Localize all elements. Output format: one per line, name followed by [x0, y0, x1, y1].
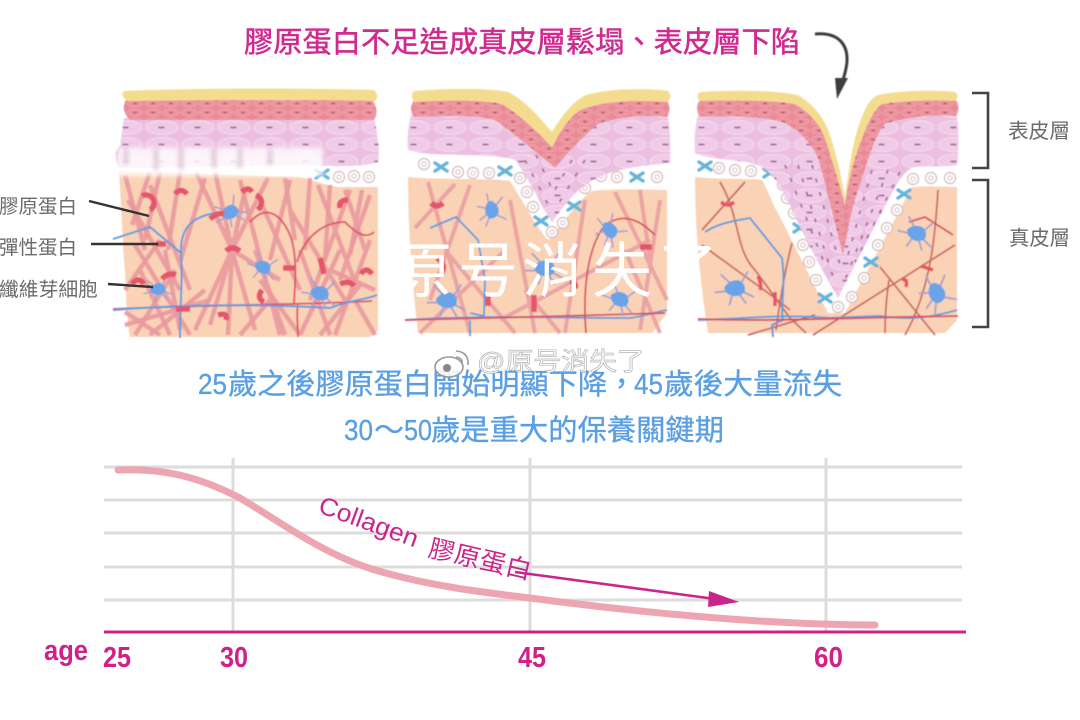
spinous layer: [116, 118, 379, 168]
watermark: weibo: @原号消失了: [477, 348, 645, 376]
spinous layer: [408, 115, 670, 222]
ring cells: [418, 158, 662, 238]
label: elastin: 彈性蛋白: [0, 237, 77, 259]
subtitle line 1: ，: [607, 369, 636, 401]
watermark: handwritten: 原号消失了: [392, 238, 718, 305]
label: dermis: 真皮層: [1009, 227, 1070, 250]
subtitle line 1: 歲之後膠原蛋白開始明顯下降: [228, 368, 607, 401]
title: 膠原蛋白不足造成真皮層鬆塌、表皮層下陷: [244, 26, 800, 59]
axis: [104, 630, 966, 634]
panel: young skin: [113, 89, 379, 338]
nuclei in dermal fold: [525, 155, 585, 208]
cross-links: [431, 203, 652, 312]
fibroblasts: [144, 193, 341, 313]
cross-links: [721, 202, 933, 306]
fibroblasts: [715, 211, 958, 316]
stratum corneum: [698, 91, 958, 205]
granular layer: [411, 100, 670, 168]
label: epidermis: 表皮層: [1008, 120, 1070, 143]
blue vessel: [698, 218, 957, 337]
label: fibroblast: 纖維芽細胞: [0, 279, 98, 301]
basal ring cells: [316, 170, 374, 182]
arrow: pointing into wrinkle: [815, 34, 848, 99]
subtitle line 1: 45: [634, 369, 663, 401]
grid: [104, 458, 962, 632]
label: collagen: 膠原蛋白: [0, 196, 77, 218]
collagen fibers: [702, 182, 955, 335]
subtitle line 1: [198, 368, 842, 401]
axis label: age: age: [44, 635, 88, 667]
nuclei in dermal fold: [785, 165, 900, 280]
dermis: [408, 177, 667, 333]
bracket: dermis: [972, 180, 988, 327]
ring cells: [699, 162, 956, 312]
red vessel: [698, 217, 958, 320]
tick 45: 45: [518, 642, 546, 674]
tick 60: 60: [814, 642, 843, 674]
fibroblasts: [425, 194, 642, 321]
subtitle line 2: 歲是重大的保養關鍵期: [431, 414, 724, 447]
subtitle line 1: 25: [198, 369, 227, 401]
collagen fibers: [415, 182, 667, 333]
subtitle line 2: ～: [374, 415, 404, 447]
collagen curve: [118, 470, 875, 625]
bracket: epidermis: [972, 93, 988, 168]
curve label: Collagen: Collagen: [315, 491, 422, 553]
granular layer: [124, 100, 377, 120]
spinous layer: [695, 114, 958, 298]
subtitle line 2: 50: [404, 415, 432, 447]
trend arrow: [515, 572, 739, 607]
stratum corneum: [122, 89, 377, 101]
tick 25: 25: [103, 642, 131, 674]
panel: thinning skin: [405, 89, 670, 336]
curve label: collagen in Chinese: 膠原蛋白: [426, 535, 534, 585]
granular layer: [697, 100, 958, 255]
collagen fibers: [125, 172, 375, 335]
watermark: weibo: [435, 348, 645, 377]
subtitle line 1: 歲後大量流失: [664, 368, 842, 401]
panel: collapsed skin: [695, 91, 958, 337]
line chart: collagen decline: [104, 458, 966, 632]
leader lines: [89, 201, 158, 287]
elastin and vessels: [113, 213, 374, 337]
tick 30: 30: [220, 642, 248, 674]
subtitle line 2: 30: [344, 415, 373, 447]
faded patch: [118, 148, 323, 176]
blue vessel: [405, 217, 667, 336]
dermis: [119, 171, 378, 337]
stratum corneum: [412, 89, 670, 147]
cross-links: [132, 189, 372, 320]
red vessel: [405, 218, 665, 333]
dermis: [695, 177, 957, 333]
